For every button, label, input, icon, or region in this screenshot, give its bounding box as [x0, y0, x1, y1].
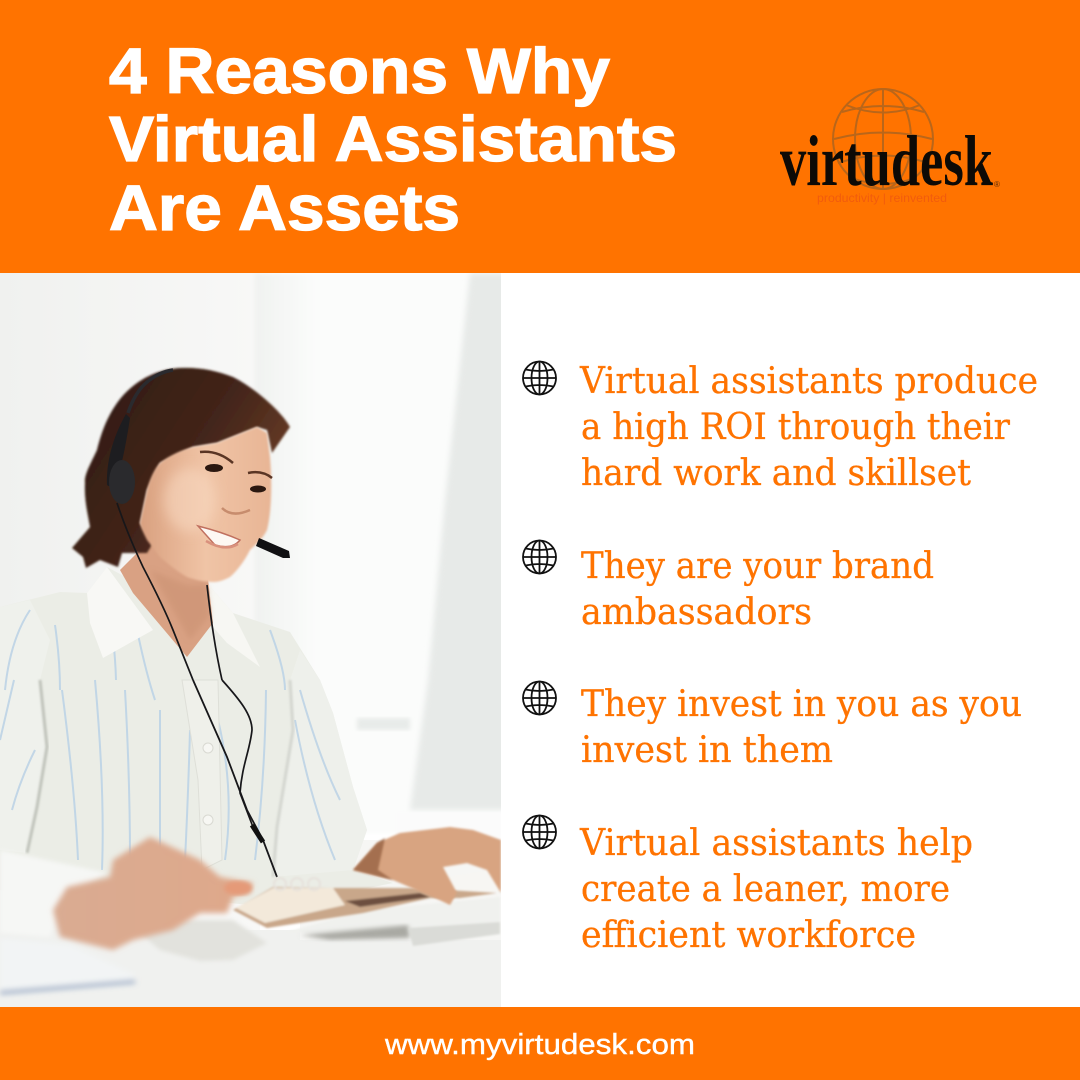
footer website address: www.myvirtudesk.com: [384, 1029, 695, 1061]
reason 4 text: Virtual assistants help: [579, 823, 973, 864]
fingertip shading: [224, 881, 252, 895]
right wrist shadow: [353, 838, 393, 880]
title: [109, 35, 677, 244]
mouse: [140, 920, 267, 961]
headset: [107, 370, 290, 877]
panel: reasons list: [523, 361, 1038, 956]
reason 1 text: hard work and skillset: [581, 453, 972, 494]
tagline: productivity | reinvented: [817, 191, 947, 205]
icon: globe 1: [523, 362, 556, 394]
neck: [120, 540, 213, 657]
shirt stripes: [0, 580, 340, 870]
keyboard: [294, 920, 500, 946]
icon: globe 4: [523, 816, 556, 848]
background wall and curtains: [0, 273, 501, 930]
placket: [182, 680, 222, 870]
left hand: [53, 837, 253, 950]
left cuff: [0, 852, 103, 904]
footer band: [0, 1007, 1080, 1080]
reason 4 text: efficient workforce: [581, 915, 916, 956]
hair: [72, 368, 290, 568]
sleeve fold shading: [27, 680, 47, 853]
right hand: [353, 827, 501, 905]
reason 4 text: create a leaner, more: [581, 869, 950, 910]
paper stack: [0, 977, 138, 998]
cheek highlight: [164, 468, 216, 532]
shirt: [0, 567, 393, 937]
reason 3: [523, 682, 1022, 771]
wordmark: virtudesk: [780, 121, 993, 201]
header band: [0, 0, 1080, 273]
desk: [260, 930, 501, 1007]
title: Virtual Assistants: [109, 103, 677, 175]
reason 3 text: They invest in you as you: [581, 684, 1022, 725]
reason 4: [523, 816, 973, 956]
icon: globe 2: [523, 540, 556, 574]
reason 1 text: Virtual assistants produce: [579, 361, 1038, 402]
facial features: [198, 452, 272, 547]
registered mark: ®: [994, 180, 1000, 189]
face: [140, 427, 271, 582]
reason 3 text: invest in them: [581, 730, 833, 771]
reason 2 text: They are your brand: [581, 546, 934, 587]
reason 2 text: ambassadors: [581, 592, 812, 633]
reason 2: [523, 540, 934, 633]
title: 4 Reasons Why: [109, 35, 610, 107]
title: Are Assets: [109, 172, 460, 244]
collar: [87, 567, 153, 658]
planner notebook: [233, 878, 497, 928]
photo: woman with headset at desk: [0, 273, 510, 1007]
logo: virtudesk: [780, 89, 1000, 205]
reason 1: [523, 361, 1038, 494]
reason 1 text: a high ROI through their: [581, 407, 1011, 448]
icon: globe 3: [523, 682, 556, 714]
icon: logo globe: [833, 89, 933, 189]
